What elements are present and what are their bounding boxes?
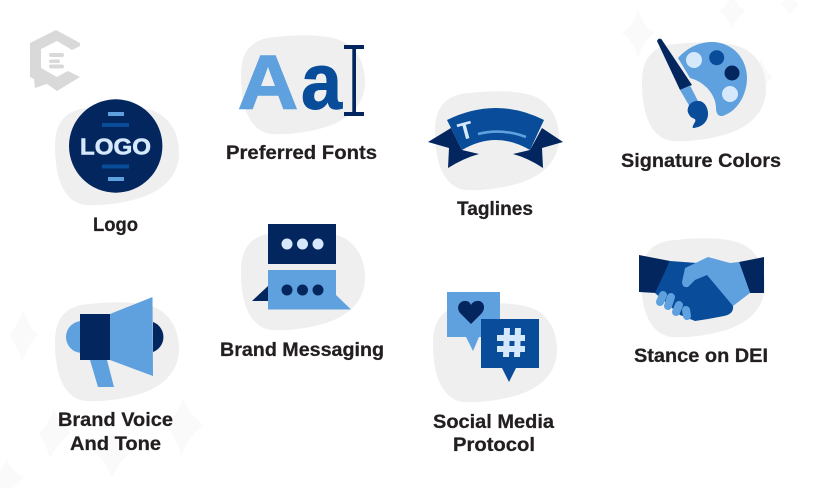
- label: preferred fonts: Preferred Fonts: [226, 143, 377, 164]
- panel: stance on DEI: [634, 238, 768, 367]
- panel: logo: [55, 99, 179, 236]
- brand logo mark: [30, 30, 80, 91]
- label: social media protocol: Protocol: [453, 435, 535, 456]
- label: social media protocol: Social Media: [433, 412, 554, 433]
- panel: brand voice and tone: [55, 297, 179, 455]
- icon: font sample: [238, 36, 364, 126]
- label: taglines: Taglines: [457, 199, 533, 220]
- panel: social media protocol: [433, 292, 557, 456]
- label: brand voice and tone: Brand Voice: [58, 410, 173, 431]
- icon: message bubbles: [252, 224, 351, 310]
- icon: font sample: a: [301, 36, 343, 126]
- label: logo: Logo: [93, 215, 138, 236]
- label: brand voice and tone: And Tone: [70, 434, 161, 455]
- icon: font sample: A: [238, 40, 298, 126]
- label: stance on DEI: Stance on DEI: [634, 346, 768, 367]
- panel: brand messaging: [220, 224, 384, 361]
- icon: social bubbles: [447, 292, 539, 382]
- panel: preferred fonts: [226, 35, 377, 164]
- icon: logo badge: LOGO: [80, 134, 151, 160]
- label: brand voice and tone: [58, 410, 173, 455]
- icon: megaphone: [66, 297, 163, 387]
- icon: hash symbol: [497, 328, 525, 357]
- panel: taglines: [428, 91, 563, 220]
- label: brand messaging: Brand Messaging: [220, 340, 384, 361]
- label: social media protocol: [433, 412, 554, 456]
- icon: ribbon banner: T: [455, 116, 477, 146]
- icon: paint palette and brush: [657, 39, 747, 128]
- label: signature colors: Signature Colors: [621, 151, 781, 172]
- icon: handshake: [639, 255, 764, 321]
- panel: signature colors: [621, 39, 781, 172]
